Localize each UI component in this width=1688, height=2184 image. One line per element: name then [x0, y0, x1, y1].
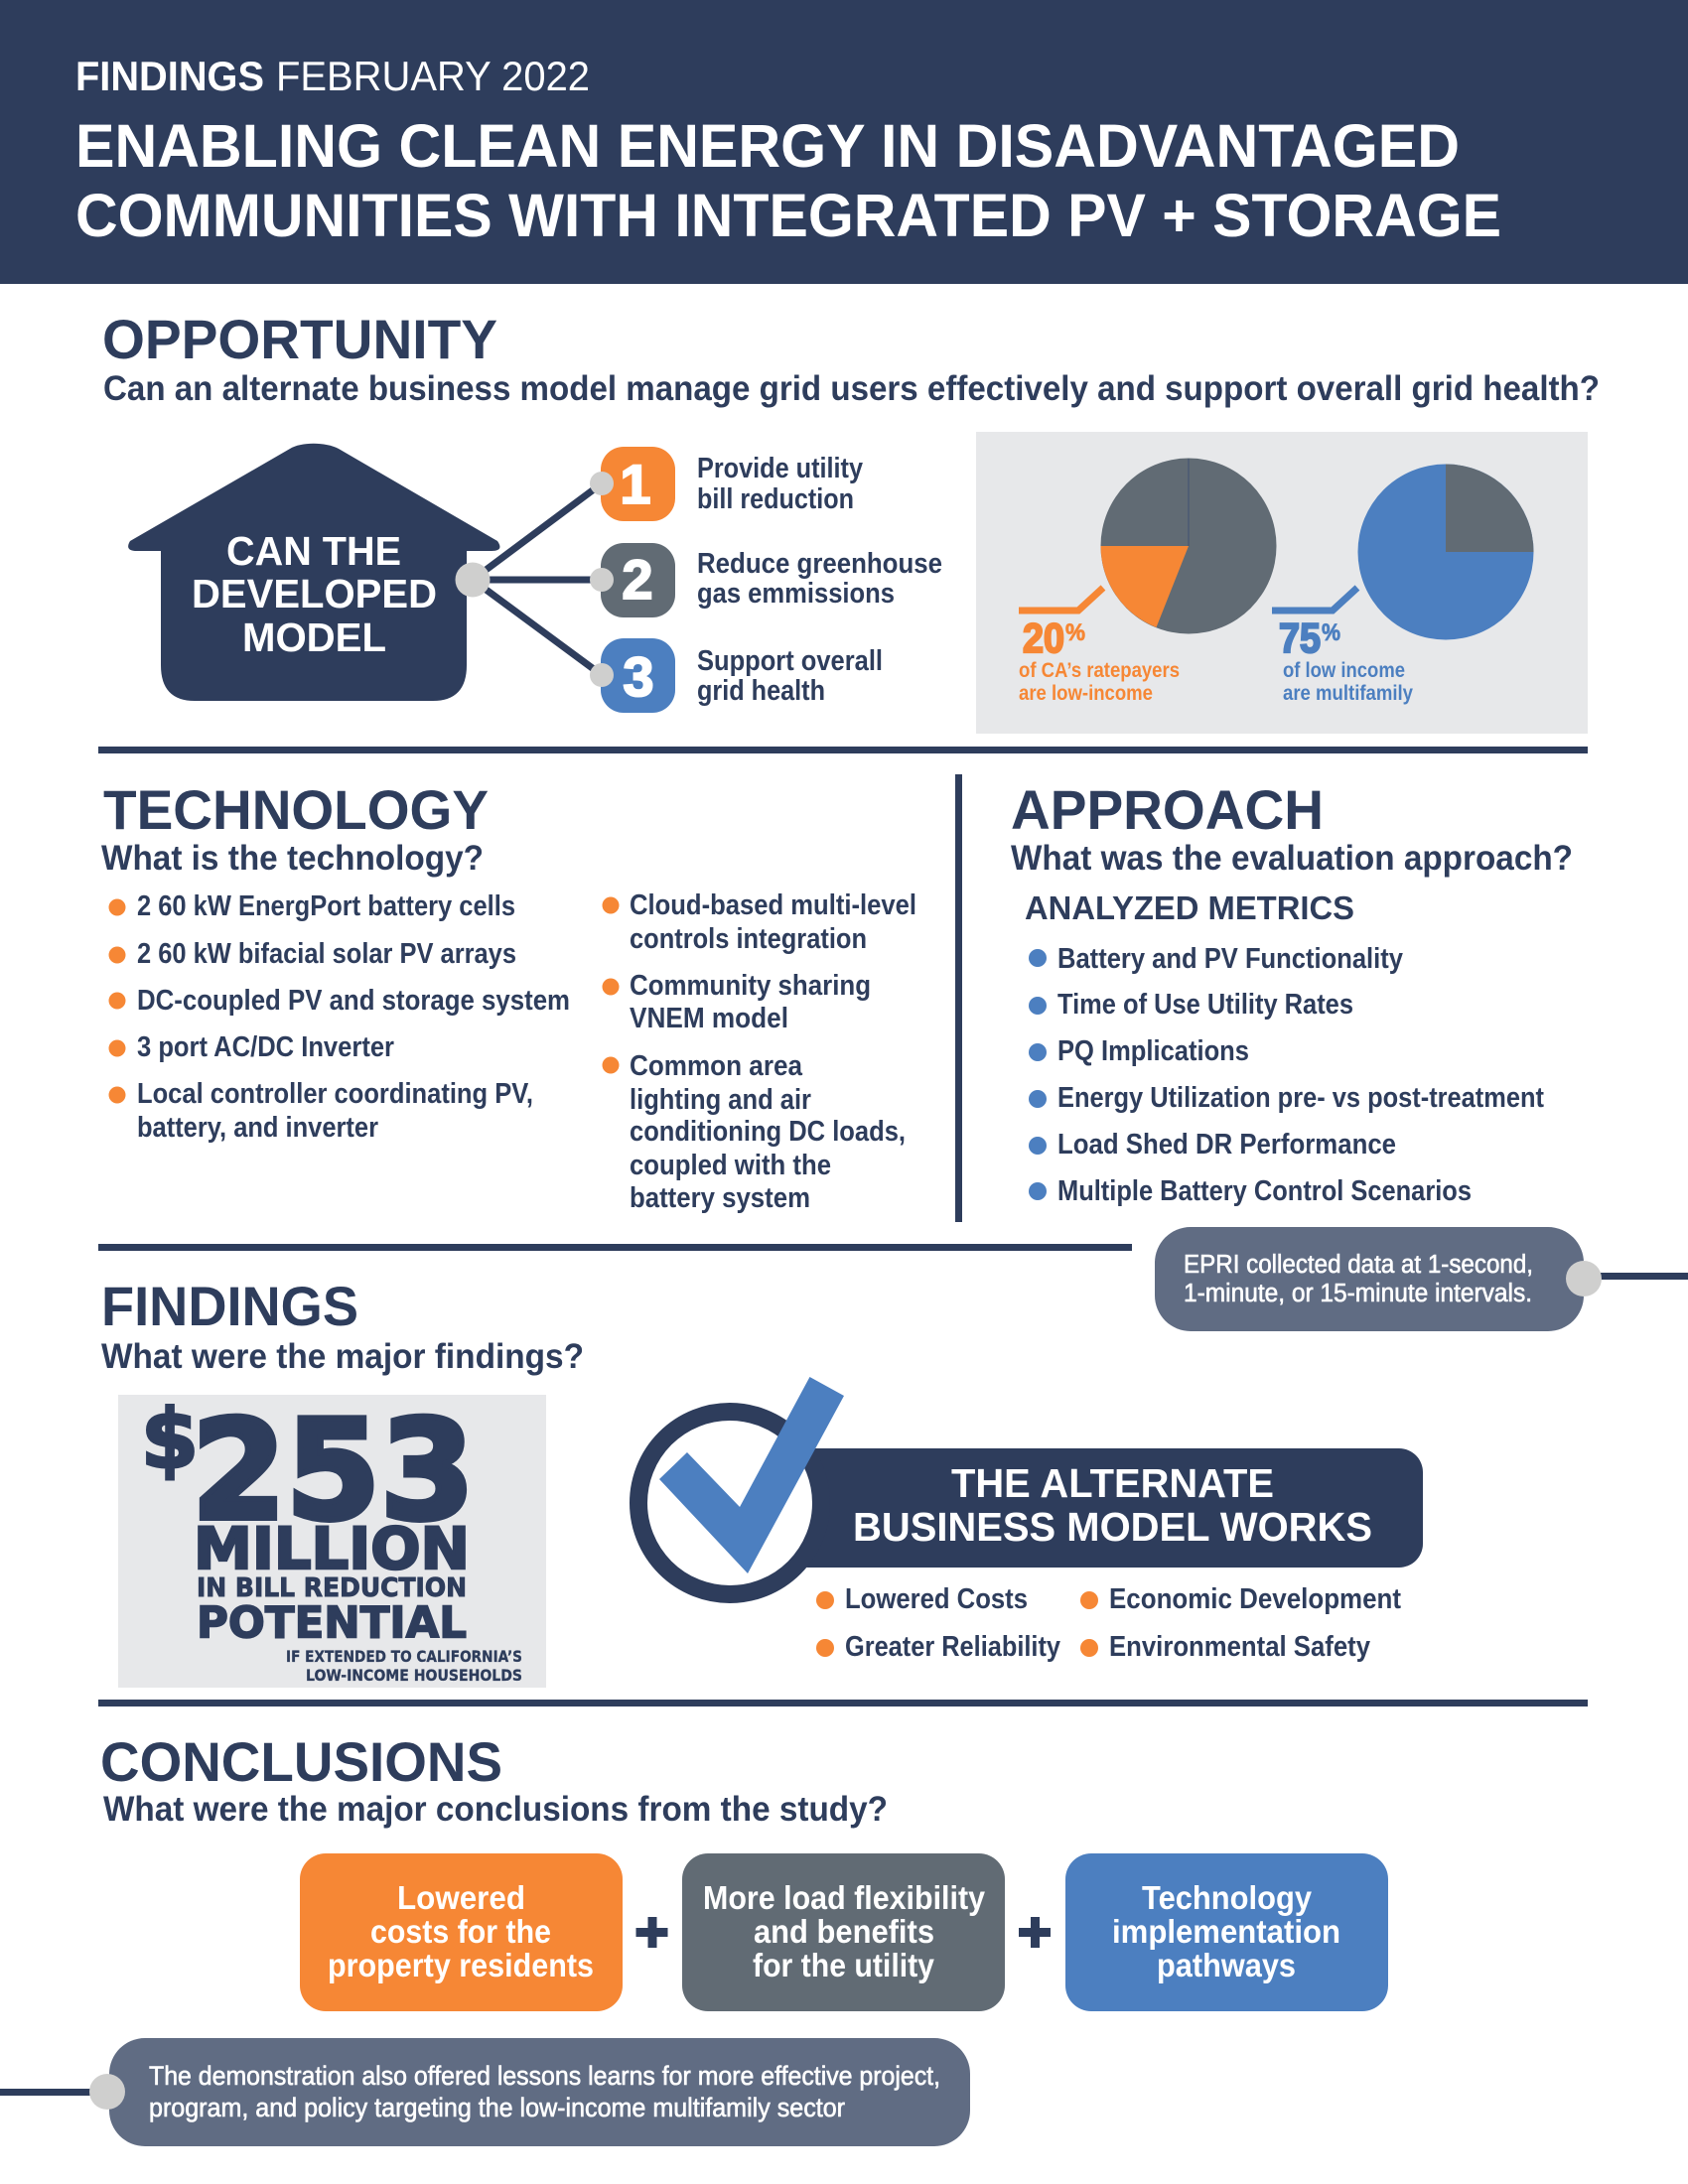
header eyebrow: findings date: FEBRUARY 2022: [276, 53, 590, 99]
stat: 20 percent: of CA’s ratepayers: [1019, 659, 1180, 682]
bullet list: right column: controls integration: [630, 923, 867, 955]
bullet list: left column: Local controller coordinating PV,: [137, 1078, 533, 1110]
bullet list: right column: battery system: [630, 1182, 810, 1214]
pie chart: 20 percent: [1100, 459, 1277, 633]
stat: 75 percent: are multifamily: [1283, 682, 1413, 705]
box: technology pathways: [1065, 1853, 1388, 2011]
panel: developed model diagram: [128, 444, 942, 713]
connector hub dot: [455, 562, 491, 598]
bullet list: right column: Common area: [630, 1050, 803, 1082]
bullet list: outcomes: Economic Development: [1109, 1583, 1401, 1615]
heading: findings: FINDINGS: [101, 1275, 358, 1337]
bullet list: right column: [602, 889, 916, 1214]
subheading: technology question: What is the technology?: [101, 838, 484, 878]
goal 1 text: bill reduction: [697, 483, 854, 515]
panel: pie charts: [976, 432, 1588, 734]
subheading: conclusions question: What were the major conclusions from the study?: [103, 1789, 888, 1829]
bullet list: left column: 2 60 kW bifacial solar PV arrays: [137, 938, 516, 970]
goal 3 text: Support overall: [697, 645, 883, 677]
panel: approach: [1011, 778, 1573, 1207]
subheading: findings question: What were the major findings?: [101, 1336, 584, 1376]
box: technology pathways: pathways: [1157, 1947, 1296, 1983]
goal 1 text: [697, 453, 863, 515]
bullet list: metrics: [1029, 943, 1544, 1207]
bullet list: left column: [109, 890, 570, 1144]
banner: alternate business model works: BUSINESS MODEL WORKS: [853, 1504, 1372, 1550]
callout: data collection: 1-minute, or 15-minute intervals.: [1184, 1280, 1532, 1307]
icon: house: CAN THE: [226, 528, 401, 574]
bullet list: right column: Cloud-based multi-level: [630, 889, 916, 921]
stat panel: 253 million: POTENTIAL: [197, 1598, 467, 1648]
stat panel: 253 million: IF EXTENDED TO CALIFORNIA’S: [286, 1647, 522, 1666]
callout: lessons learned: [0, 2038, 970, 2146]
stat: 20 percent: [1019, 614, 1180, 705]
bullet list: right column: VNEM model: [630, 1003, 788, 1034]
goal 2 text: [697, 548, 942, 610]
bullet list: metrics: Multiple Battery Control Scenarios: [1057, 1175, 1472, 1207]
callout: lessons learned: The demonstration also offered lessons learns for more effective project,: [149, 2061, 940, 2091]
box: load flexibility: [682, 1853, 1005, 2011]
badge 2: [590, 543, 675, 617]
bullet list: right column: Community sharing: [630, 970, 871, 1002]
title: [75, 112, 1501, 249]
badge 1: [590, 447, 675, 521]
subheading: opportunity question: Can an alternate business model manage grid users effectively and support overall grid health?: [103, 368, 1600, 408]
bullet list: left column: 2 60 kW EnergPort battery cells: [137, 890, 515, 922]
bullet list: right column: conditioning DC loads,: [630, 1116, 906, 1148]
bullet list: left column: 3 port AC/DC Inverter: [137, 1031, 394, 1063]
box: load flexibility: and benefits: [754, 1913, 934, 1950]
bullet list: metrics: Time of Use Utility Rates: [1057, 989, 1353, 1021]
subheading: analyzed metrics: ANALYZED METRICS: [1025, 889, 1354, 926]
callout line: orange: [1019, 588, 1103, 611]
bullet list: metrics: Battery and PV Functionality: [1057, 943, 1403, 975]
bullet list: left column: battery, and inverter: [137, 1112, 378, 1144]
stat: 75 percent: %: [1322, 619, 1340, 646]
heading: technology: TECHNOLOGY: [103, 778, 489, 841]
callout line: blue: [1272, 588, 1357, 611]
subheading: approach question: What was the evaluation approach?: [1011, 838, 1573, 878]
panel: technology: [101, 778, 916, 1214]
box: lowered costs: Lowered: [397, 1879, 525, 1916]
callout: data collection: EPRI collected data at 1-second,: [1184, 1251, 1533, 1279]
box: load flexibility: More load flexibility: [703, 1879, 986, 1916]
box: lowered costs: [300, 1853, 623, 2011]
badge 3: [590, 638, 675, 713]
goal 3 text: grid health: [697, 675, 825, 707]
badge 1: 1: [620, 453, 651, 515]
bullet list: metrics: PQ Implications: [1057, 1035, 1249, 1067]
stat panel: 253 million: IN BILL REDUCTION: [197, 1573, 467, 1603]
stat panel: 253 million: MILLION: [194, 1515, 470, 1582]
stat: 75 percent: [1279, 614, 1413, 705]
icon: plus: [635, 1917, 667, 1948]
bullet list: right column: lighting and air: [630, 1084, 811, 1116]
pie chart: 75 percent: [1358, 465, 1533, 639]
title: COMMUNITIES WITH INTEGRATED PV + STORAGE: [75, 182, 1501, 249]
box: lowered costs: property residents: [328, 1947, 594, 1983]
bullet list: metrics: Load Shed DR Performance: [1057, 1129, 1396, 1160]
banner: alternate business model works: THE ALTERNATE: [951, 1460, 1274, 1506]
badge 3: 3: [623, 645, 654, 708]
icon: house: MODEL: [242, 614, 386, 660]
heading: approach: APPROACH: [1011, 778, 1324, 841]
stat panel: 253 million: LOW-INCOME HOUSEHOLDS: [306, 1666, 522, 1685]
title: ENABLING CLEAN ENERGY IN DISADVANTAGED: [75, 112, 1460, 180]
bullet list: right column: coupled with the: [630, 1150, 831, 1181]
bullet list: left column: DC-coupled PV and storage system: [137, 985, 570, 1017]
badge 2: 2: [622, 548, 653, 611]
stat panel: 253 million: 253: [192, 1391, 475, 1551]
box: load flexibility: for the utility: [753, 1947, 935, 1983]
header eyebrow: findings date: FINDINGS: [75, 53, 264, 99]
callout: data collection: [1155, 1227, 1688, 1331]
goal 2 text: gas emmissions: [697, 578, 895, 610]
stat: 20 percent: %: [1065, 619, 1085, 646]
bullet list: outcomes: Lowered Costs: [845, 1583, 1028, 1615]
icon: house: [128, 444, 499, 701]
heading: conclusions: CONCLUSIONS: [100, 1730, 502, 1793]
stat: 20 percent: 20: [1023, 614, 1064, 661]
bullet list: outcomes: Environmental Safety: [1109, 1631, 1370, 1663]
icon: house: DEVELOPED: [192, 571, 437, 616]
bullet list: outcomes: Greater Reliability: [845, 1631, 1060, 1663]
bullet list: metrics: Energy Utilization pre- vs post-treatment: [1057, 1082, 1544, 1114]
heading: opportunity: OPPORTUNITY: [102, 308, 497, 370]
box: lowered costs: costs for the: [370, 1913, 551, 1950]
connector lines: [473, 483, 602, 675]
goal 2 text: Reduce greenhouse: [697, 548, 942, 580]
icon: checkmark in circle: [638, 1377, 844, 1594]
callout: lessons learned: program, and policy targeting the low-income multifamily sector: [149, 2093, 845, 2122]
stat panel: 253 million: [118, 1391, 546, 1688]
stat: 75 percent: 75: [1279, 614, 1321, 661]
stat panel: 253 million: $: [141, 1393, 199, 1487]
header eyebrow: findings date: [75, 53, 590, 99]
panel: conclusions: [0, 1730, 1388, 2146]
banner: alternate business model works: [784, 1448, 1423, 1568]
panel: findings: [101, 1275, 1423, 1688]
icon: plus: [1019, 1917, 1051, 1948]
stat: 20 percent: are low-income: [1019, 682, 1153, 705]
goal 1 text: Provide utility: [697, 453, 863, 484]
box: technology pathways: implementation: [1112, 1913, 1340, 1950]
header band: [0, 0, 1688, 284]
goal 3 text: [697, 645, 883, 707]
stat: 75 percent: of low income: [1283, 659, 1405, 682]
bullet list: outcomes: [816, 1583, 1401, 1663]
box: technology pathways: Technology: [1142, 1879, 1313, 1916]
